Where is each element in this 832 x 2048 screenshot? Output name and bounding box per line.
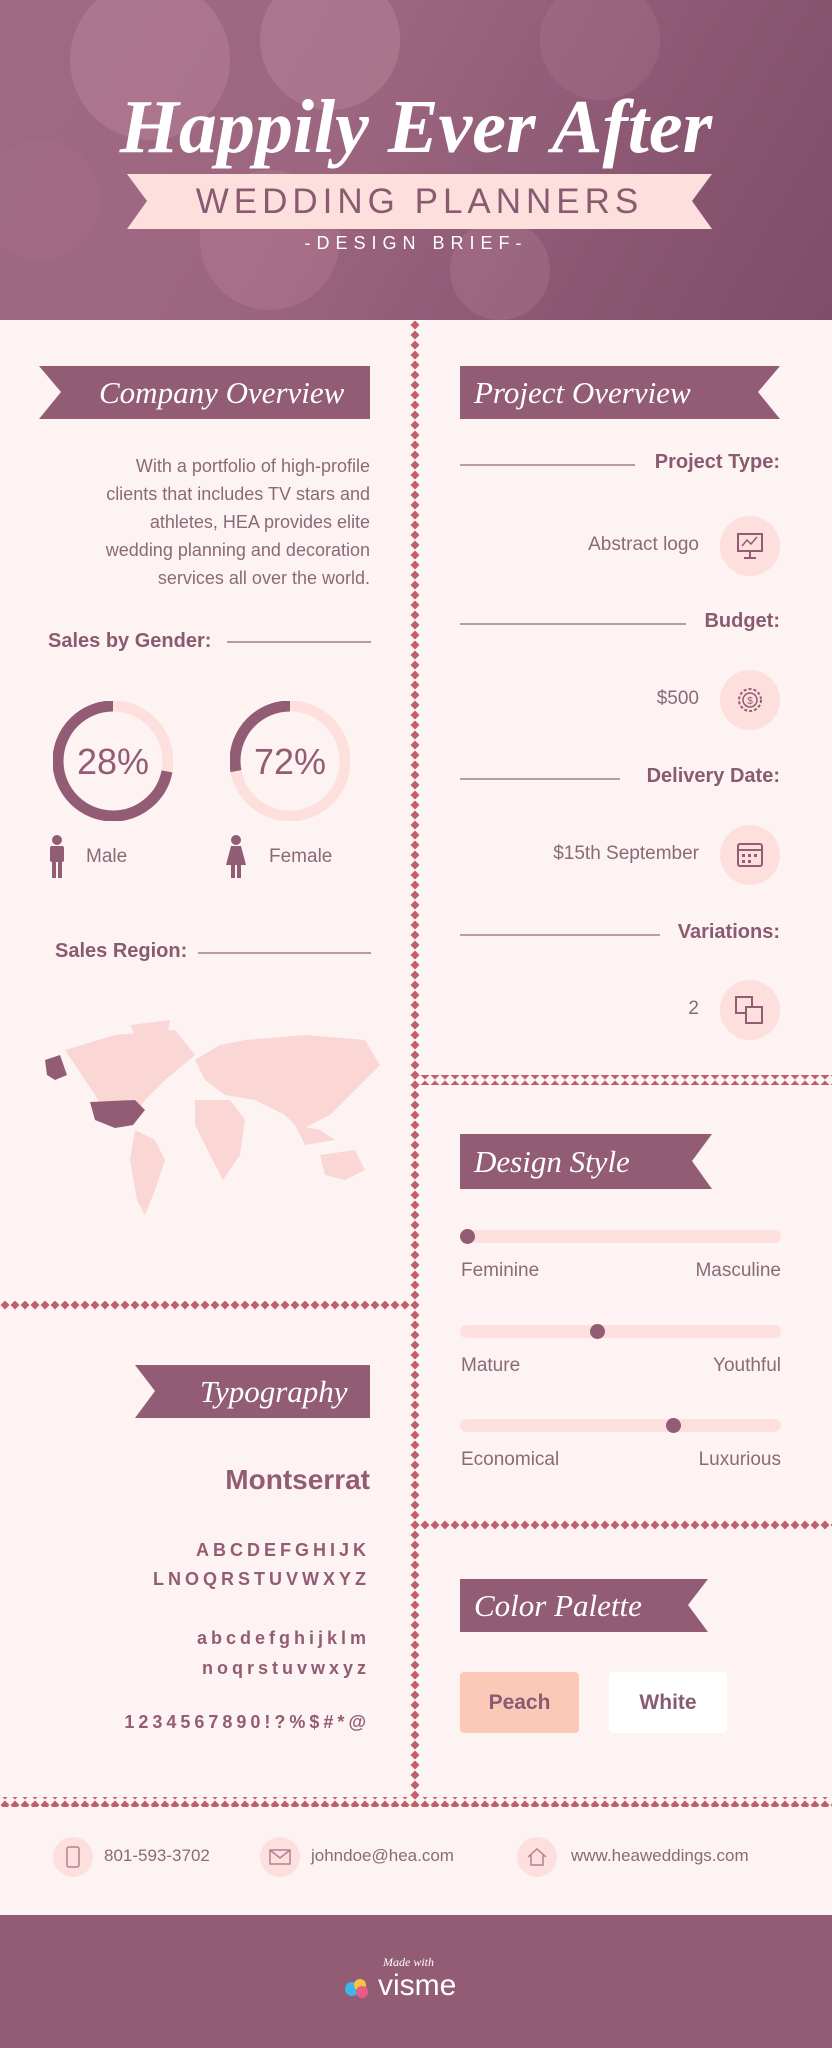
item: project type [460,464,635,466]
ribbon: color palette: Color Palette [474,1588,642,1623]
contact: website: www.heaweddings.com [571,1846,749,1865]
slider: feminine/masculine [460,1230,781,1243]
panel: company overview [39,366,380,1215]
footer [0,1915,832,2048]
text: description: athletes, HEA provides elite [150,512,370,532]
header banner [0,0,832,320]
swatch: peach: Peach [489,1691,550,1714]
ribbon: typography: Typography [200,1374,348,1409]
swatch: white [609,1672,727,1733]
panel: design style [460,1134,712,1189]
uppercase sample: ABCDEFGHIJK [196,1540,370,1560]
text: 2 [688,998,699,1019]
donut: male 28%: 28% [77,741,149,782]
ribbon: design style [460,1134,712,1189]
text: Feminine [461,1260,539,1281]
ribbon subtitle: WEDDING PLANNERS [196,182,643,221]
text: Mature [461,1355,520,1376]
ribbon: typography [135,1365,370,1418]
made with visme: Made with [383,1955,434,1969]
icon: squares [720,980,780,1040]
text: Project Type: [655,451,780,473]
panel: color palette [460,1579,727,1733]
text: Abstract logo [588,534,699,555]
text: Variations: [678,921,780,943]
contact: phone: 801-593-3702 [104,1846,210,1865]
slider: mature/youthful [460,1325,781,1338]
uppercase sample [153,1540,370,1589]
contacts row [53,1837,749,1877]
lowercase sample: abcdefghijklm [197,1628,370,1648]
swatch: peach [460,1672,579,1733]
text: Masculine [695,1260,781,1281]
label: male: Male [86,846,127,867]
ribbon: design style: Design Style [474,1144,630,1179]
label: female: Female [269,846,332,867]
contact: phone [53,1837,210,1877]
icon: female [226,835,246,878]
text: Economical [461,1449,559,1470]
swatch: white: White [639,1691,697,1714]
item: budget [460,623,686,625]
made with visme: visme [378,1969,456,2002]
font name: Montserrat [225,1464,370,1495]
ribbon: project overview: Project Overview [474,375,691,410]
text: $15th September [553,843,699,864]
text: description: wedding planning and decoration [106,540,370,560]
icon: gear: $ [747,696,753,707]
icon: calendar [720,825,780,885]
lowercase sample [197,1628,370,1678]
text: $500 [657,688,699,709]
heading: sales region: Sales Region: [55,940,187,962]
title: Happily Ever After [120,85,712,169]
numbers sample: 1234567890!?%$#*@ [124,1712,370,1732]
made with visme [345,1955,456,2002]
world map [45,1020,380,1215]
text: description: With a portfolio of high-profile [136,456,370,476]
uppercase sample: LNOQRSTUVWXYZ [153,1569,370,1589]
item: delivery date [460,778,620,780]
contact: email: johndoe@hea.com [311,1846,454,1865]
design brief: -DESIGN BRIEF- [304,233,528,253]
heading: sales by gender: Sales by Gender: [48,630,211,652]
ribbon: company overview [39,366,370,419]
ribbon: color palette [460,1579,708,1632]
panel: typography [135,1365,370,1418]
panel: project overview [460,366,780,419]
text: Budget: [704,610,780,632]
text: Luxurious [699,1449,781,1470]
contact: email [260,1837,454,1877]
lowercase sample: noqrstuvwxyz [202,1658,370,1678]
icon: gear [720,670,780,730]
donut: female 72% [230,701,350,821]
text: Youthful [713,1355,781,1376]
icon: male [50,835,64,878]
item: variations [460,934,660,936]
text: Delivery Date: [647,765,780,787]
slider: economical/luxurious [460,1419,781,1432]
donut: female 72%: 72% [254,741,326,782]
text: description: clients that includes TV stars and [106,484,370,504]
text: description: services all over the world. [158,568,370,588]
contact: website [517,1837,749,1877]
icon: monitor [720,516,780,576]
text: description [106,456,370,588]
ribbon: project overview [460,366,780,419]
donut: male 28% [53,701,173,821]
ribbon subtitle [127,174,712,229]
ribbon: company overview: Company Overview [99,375,344,410]
